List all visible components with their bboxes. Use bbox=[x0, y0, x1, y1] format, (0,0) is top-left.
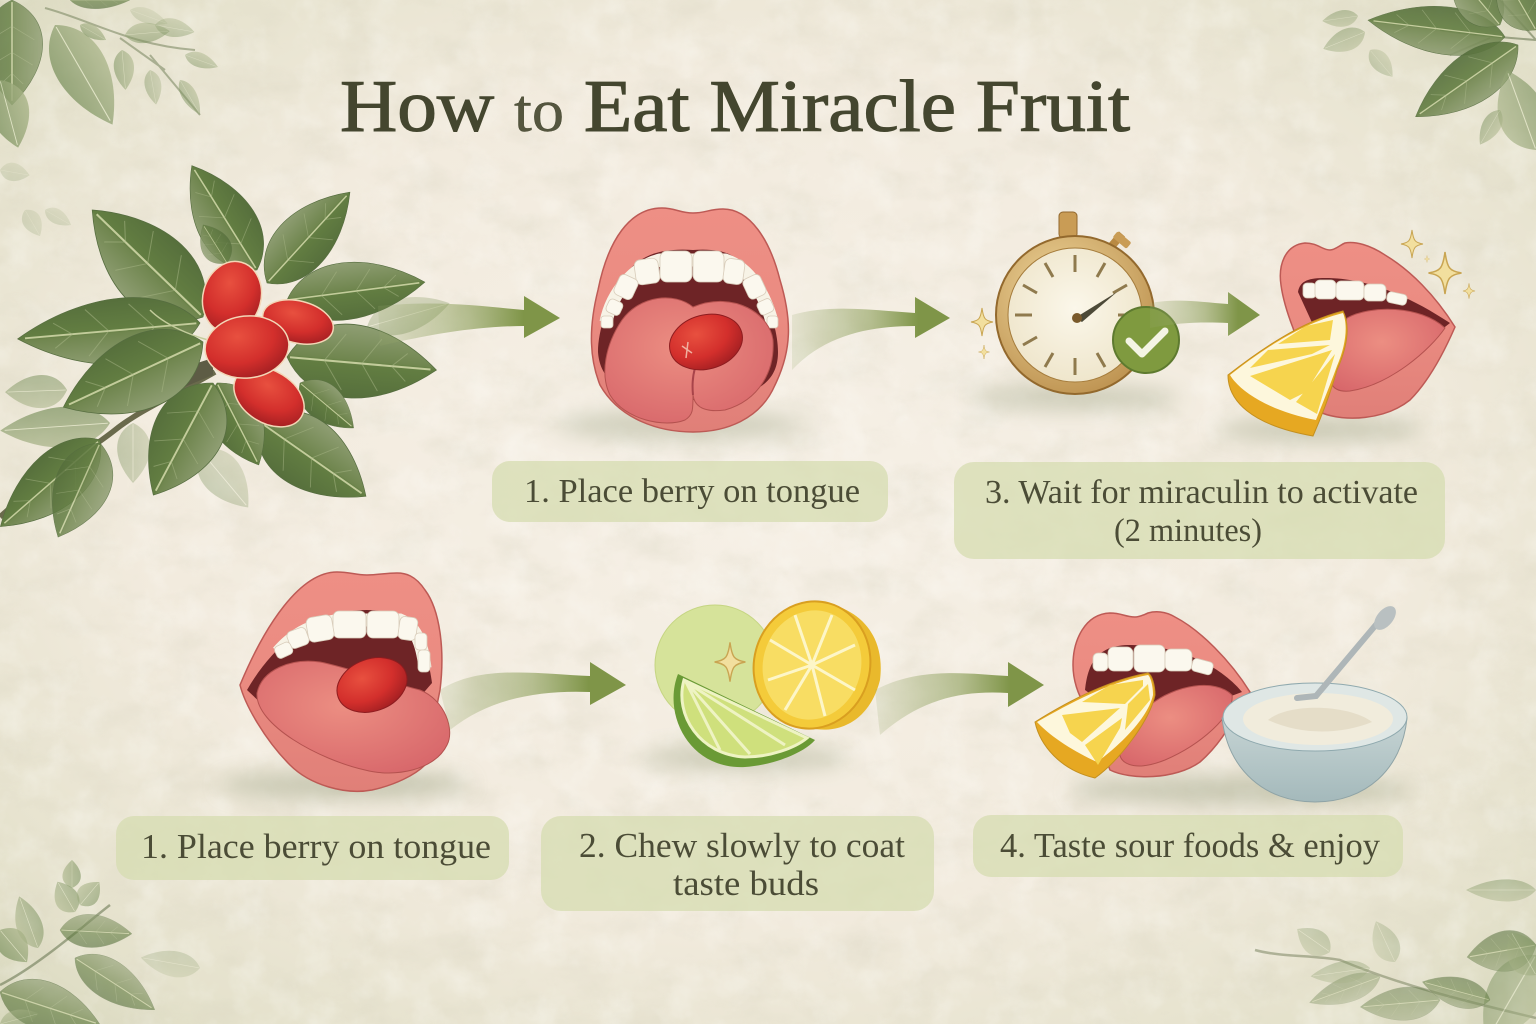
arrow: citrus to tasting bbox=[875, 662, 1044, 735]
arrow: step 1 to timer bbox=[792, 297, 950, 370]
arrow: timer to sour bbox=[1150, 292, 1260, 336]
arrow: plant to step 1 bbox=[378, 296, 560, 346]
illustration: lemon and lime bbox=[640, 588, 885, 771]
label: step 4: 4. Taste sour foods & enjoy bbox=[1000, 826, 1380, 865]
berries bbox=[195, 255, 338, 439]
illustration: mouth with lemon and yogurt bowl bbox=[1035, 602, 1410, 805]
bowl bbox=[1222, 718, 1407, 802]
label: step 1 top bbox=[492, 461, 888, 522]
label: step 4 bbox=[973, 815, 1403, 877]
label: step 3: (2 minutes) bbox=[1114, 513, 1262, 549]
faded background leaves bbox=[0, 3, 170, 240]
label: step 3: 3. Wait for miraculin to activate bbox=[985, 474, 1418, 511]
miracle fruit branch illustration bbox=[0, 3, 454, 549]
label: step 1 top: 1. Place berry on tongue bbox=[524, 473, 860, 510]
corner foliage: top left bbox=[0, 0, 221, 153]
arrow: tongue to citrus bbox=[440, 662, 626, 730]
illustration: side mouth with lemon bbox=[1215, 230, 1475, 442]
corner foliage: bottom left bbox=[0, 860, 202, 1024]
label: step 1 bottom bbox=[116, 816, 509, 880]
label: step 3 bbox=[954, 462, 1445, 559]
label: step 2: 2. Chew slowly to coat bbox=[579, 826, 905, 865]
corner foliage: bottom right bbox=[1255, 879, 1536, 1024]
illustration: front-view mouth with berry bbox=[555, 208, 805, 440]
label: step 2 bbox=[541, 816, 934, 911]
title: How to Eat Miracle Fruit bbox=[340, 66, 1130, 148]
corner foliage: top right bbox=[1319, 0, 1536, 159]
illustration: open mouth with berry on tongue, lower left bbox=[220, 572, 470, 800]
illustration: stopwatch with check bbox=[970, 212, 1180, 411]
label: step 2: taste buds bbox=[673, 864, 819, 903]
label: step 1 bottom: 1. Place berry on tongue bbox=[141, 827, 491, 866]
